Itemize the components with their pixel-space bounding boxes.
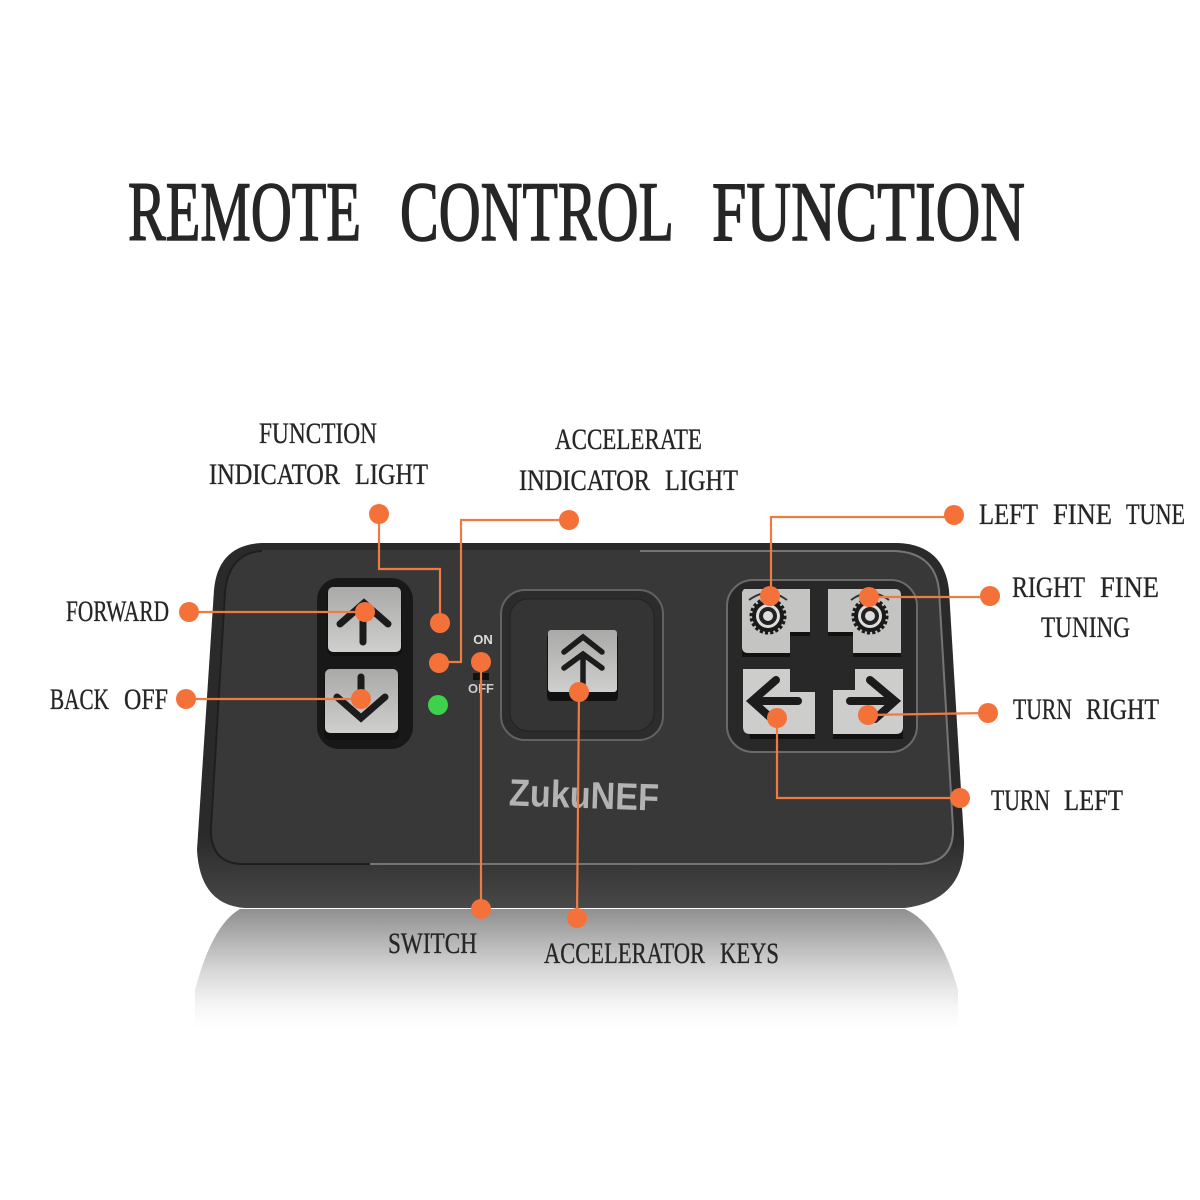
- label: right fine tuning: [1012, 571, 1159, 644]
- label: function indicator light: [209, 417, 428, 491]
- right fine tuning key: [828, 589, 901, 657]
- back off key: [324, 669, 399, 740]
- forward and back button well: [317, 578, 413, 749]
- label: function indicator light: INDICATOR: [209, 458, 340, 491]
- left fine tune key: [742, 589, 810, 657]
- label: function indicator light: LIGHT: [355, 458, 428, 491]
- remote control body: [197, 543, 964, 908]
- label: turn left: LEFT: [1064, 784, 1123, 817]
- label: back off: OFF: [124, 683, 168, 716]
- label: turn left: [991, 784, 1123, 817]
- title: FUNCTION: [712, 165, 1025, 259]
- label: accelerator keys: ACCELERATOR: [544, 937, 705, 970]
- accelerator well: [501, 590, 663, 740]
- label: back off: BACK: [50, 683, 109, 716]
- label: turn right: RIGHT: [1086, 693, 1159, 726]
- direction keys well: [727, 580, 917, 752]
- forward key: [327, 587, 402, 656]
- label: turn right: TURN: [1013, 693, 1072, 726]
- label: turn left: TURN: [991, 784, 1050, 817]
- label: right fine tuning: RIGHT: [1012, 571, 1085, 604]
- label: left fine tune: FINE: [1053, 498, 1112, 531]
- label: left fine tune: LEFT: [979, 498, 1038, 531]
- label: accelerate indicator light: INDICATOR: [519, 464, 650, 497]
- green indicator light: [428, 695, 448, 715]
- accelerator key: [547, 630, 618, 701]
- label: turn right: [1013, 693, 1159, 726]
- label: accelerator keys: KEYS: [720, 937, 779, 970]
- label: function indicator light: FUNCTION: [259, 417, 377, 450]
- label: right fine tuning: FINE: [1100, 571, 1159, 604]
- label: left fine tune: [979, 498, 1185, 531]
- turn left key: [743, 669, 815, 739]
- callout dots: [176, 504, 1000, 928]
- switch labels: OFF: [468, 681, 494, 696]
- switch labels: ON: [473, 632, 493, 647]
- label: switch: SWITCH: [388, 927, 477, 960]
- logo: ZukuNEF: [508, 772, 660, 820]
- title: REMOTE: [128, 165, 361, 259]
- turn right key: [833, 669, 903, 739]
- title: [128, 165, 1025, 259]
- switch labels: [468, 632, 494, 696]
- label: forward: FORWARD: [66, 595, 169, 628]
- label: right fine tuning: TUNING: [1041, 611, 1130, 644]
- top face: [211, 550, 953, 864]
- leader lines: [186, 514, 990, 918]
- label: accelerate indicator light: [519, 423, 738, 497]
- body side: [197, 543, 964, 908]
- label: accelerate indicator light: LIGHT: [665, 464, 738, 497]
- title: CONTROL: [400, 165, 674, 259]
- label: accelerate indicator light: ACCELERATE: [555, 423, 702, 456]
- reflection under the remote: [195, 909, 958, 1030]
